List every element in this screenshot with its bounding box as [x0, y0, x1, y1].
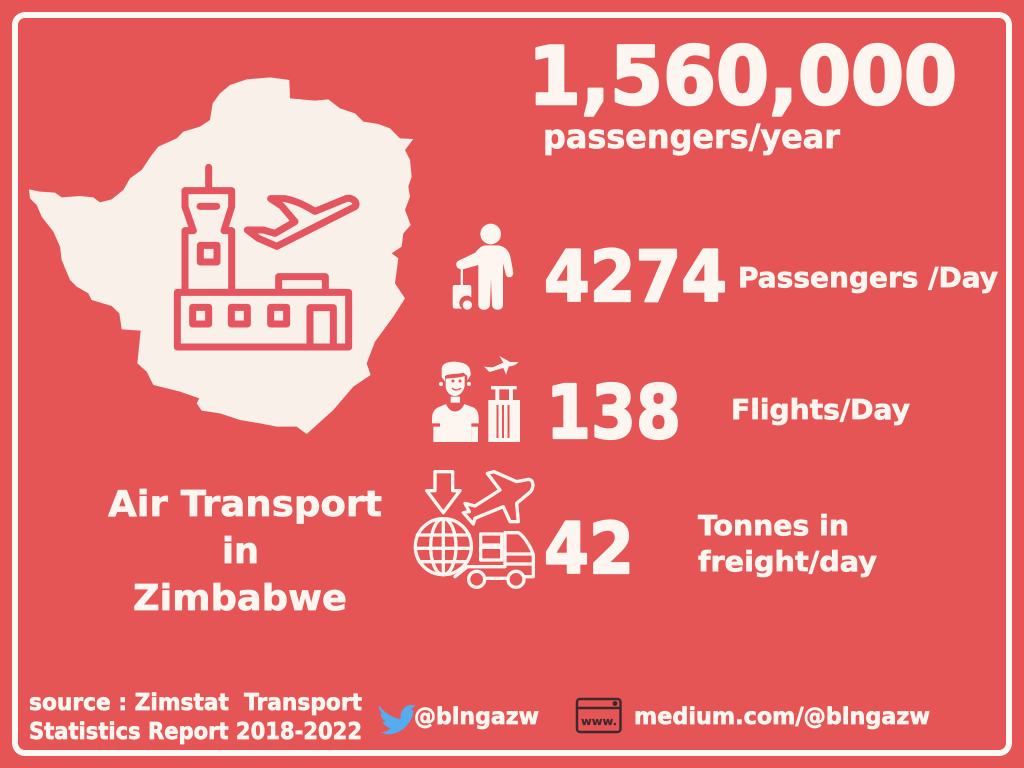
big number: 1,560,000 — [528, 30, 957, 123]
label: Tonnes in — [698, 509, 849, 542]
title: Air Transport — [108, 484, 382, 525]
face details — [452, 380, 454, 382]
website link — [577, 699, 930, 732]
source note — [29, 690, 362, 745]
label — [698, 509, 877, 578]
unit label: passengers/year — [543, 117, 841, 156]
twitter handle — [379, 704, 539, 734]
value: 4274 — [544, 236, 727, 318]
icon: browser window — [577, 699, 620, 732]
handle text: @blngazw — [414, 704, 539, 730]
source note: source : Zimstat Transport — [29, 690, 362, 716]
icon: globe, arrow, plane and truck — [415, 472, 533, 587]
icon: browser window: www. — [581, 715, 617, 728]
headline: passengers per year — [528, 30, 957, 156]
label: Flights/Day — [731, 393, 910, 426]
stat row: passengers per day — [453, 224, 998, 318]
label: Passengers /Day — [738, 261, 998, 294]
source note: Statistics Report 2018-2022 — [29, 719, 362, 745]
title — [108, 484, 382, 619]
value: 42 — [544, 508, 634, 590]
icon: man with luggage and plane — [432, 356, 520, 442]
url text: medium.com/@blngazw — [634, 704, 930, 730]
icon: twitter bird — [379, 705, 415, 734]
map silhouette — [29, 77, 413, 434]
label: freight/day — [698, 545, 877, 578]
stat row: flights per day — [432, 356, 910, 456]
value: 138 — [546, 370, 681, 456]
luggage details — [452, 380, 521, 438]
stat row: freight per day — [415, 472, 877, 590]
icon: traveller with suitcase — [453, 224, 513, 310]
title: in — [222, 531, 259, 572]
icon: airport terminal and tower — [177, 167, 356, 347]
title: Zimbabwe — [133, 578, 347, 619]
map of Zimbabwe with airport icon — [29, 77, 413, 434]
